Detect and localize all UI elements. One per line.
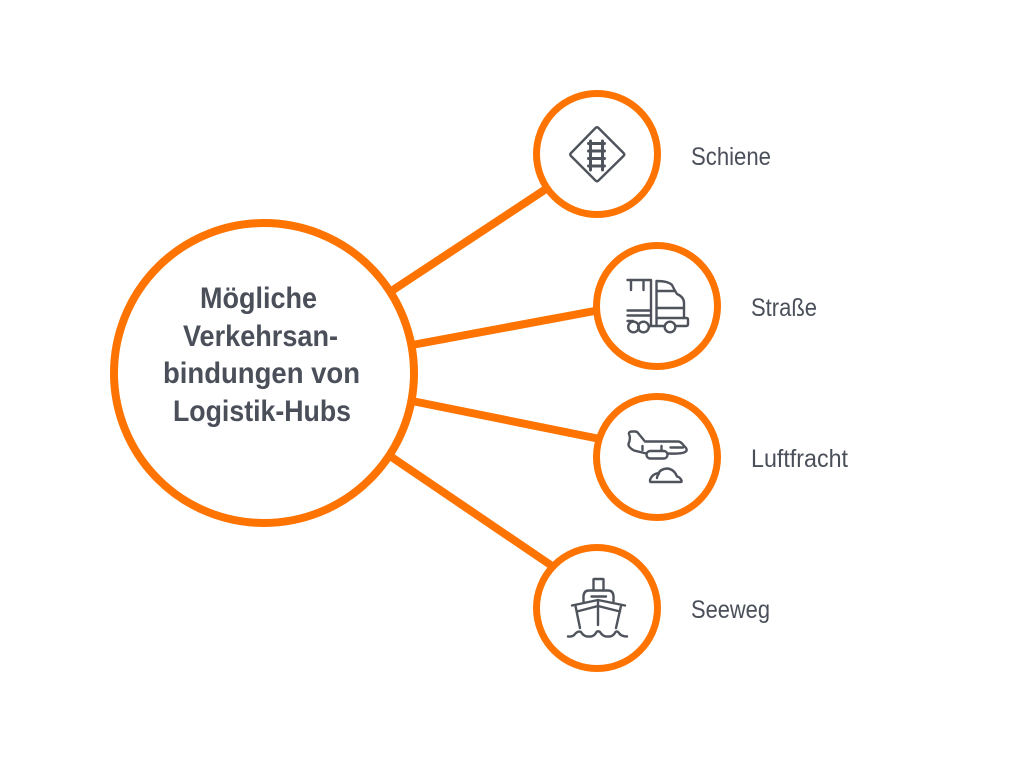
label: Seeweg: Seeweg [691, 596, 770, 624]
hub title [163, 282, 360, 428]
hub title: Mögliche [200, 282, 317, 315]
connector: hub to Straße [412, 310, 600, 345]
icon: airplane and cloud [628, 432, 687, 482]
icon: railway sign [570, 127, 624, 181]
hub title: Verkehrsan- [183, 320, 338, 353]
connector: hub to Schiene [390, 185, 552, 292]
icon: ship [568, 579, 627, 637]
node: Schiene [536, 94, 658, 214]
label: Straße: Straße [751, 294, 817, 322]
node: Seeweg [536, 548, 658, 668]
hub title: bindungen von [163, 357, 360, 390]
connector: hub to Luftfracht [412, 401, 600, 439]
node: Luftfracht [596, 396, 718, 518]
node: Straße [596, 246, 718, 366]
hub title: Logistik-Hubs [173, 395, 351, 428]
label: Schiene: Schiene [691, 143, 771, 171]
icon: truck [628, 280, 688, 332]
central hub circle [114, 223, 414, 523]
connector: hub to Seeweg [390, 456, 555, 568]
label: Luftfracht: Luftfracht [751, 445, 848, 473]
